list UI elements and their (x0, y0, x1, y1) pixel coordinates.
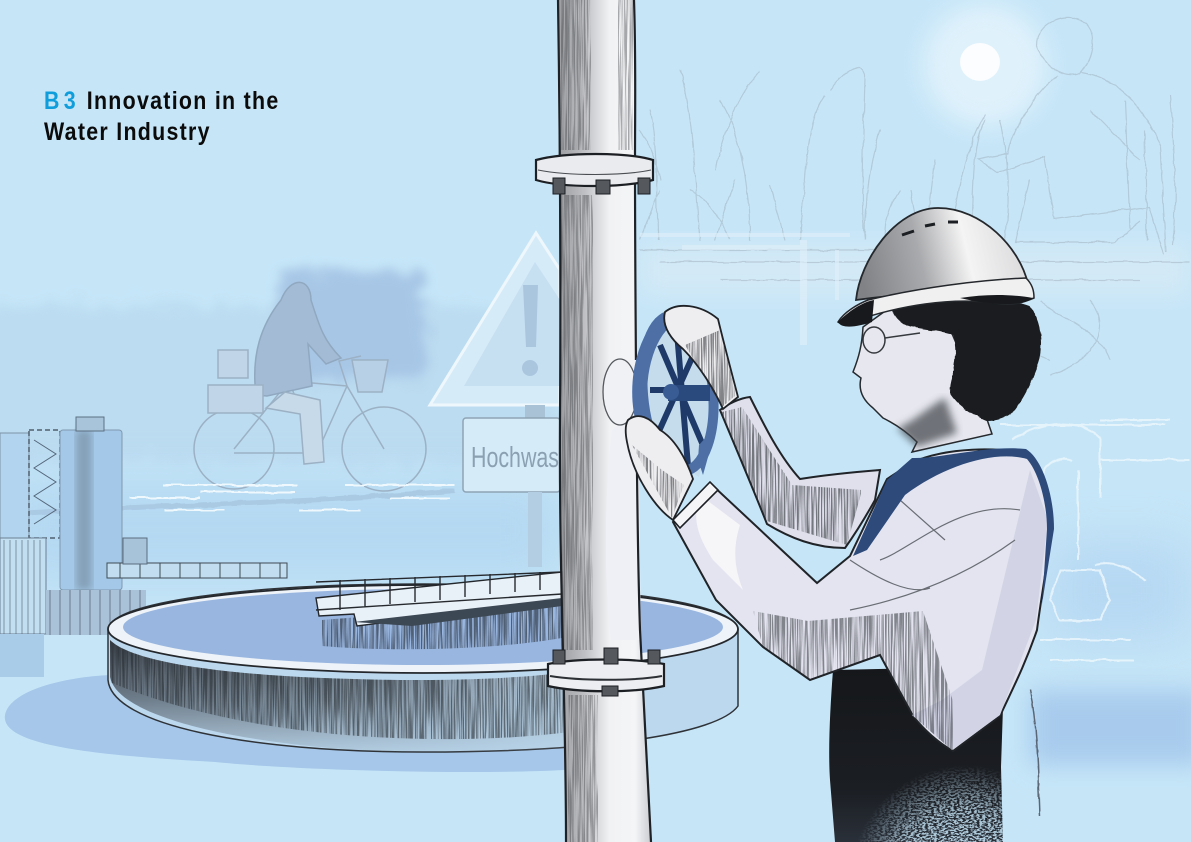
shirt highlight band (696, 495, 743, 590)
eyeglasses (863, 327, 920, 353)
tank rim (108, 585, 738, 673)
shirt hatching (753, 611, 953, 751)
worker overalls (829, 667, 1040, 842)
valve stem (603, 359, 650, 425)
tank water (123, 589, 723, 665)
warning sign: flood: Hochwas (471, 442, 559, 474)
hard hat (838, 208, 1034, 327)
dark water reflection (322, 598, 562, 649)
upper pipe flange (536, 154, 653, 194)
walkway railings (316, 572, 562, 610)
water reflection strips (640, 233, 850, 345)
shirt shadow lavender (912, 470, 1048, 750)
valve handwheel (636, 311, 720, 477)
title: Water Industry (44, 118, 211, 146)
sun glow (923, 3, 1047, 127)
neck shadow (897, 398, 957, 447)
white water strokes (130, 485, 455, 510)
background sketch: cyclist (194, 282, 426, 491)
tank wall streaks (110, 640, 570, 739)
lower walkway platform (354, 598, 562, 626)
warning sign: flood (430, 233, 560, 567)
shirt seam lines (850, 500, 1020, 610)
worker head (853, 298, 1042, 452)
clarifier tank (108, 572, 738, 752)
hair (892, 298, 1042, 421)
tank outer wall (108, 584, 738, 752)
lower pipe flange (548, 648, 664, 696)
vertical pipe (558, 0, 652, 842)
worker shirt: torso and lower arm (673, 449, 1051, 751)
worker hands (626, 306, 738, 520)
cuff (673, 482, 718, 528)
title: B3 Innovation in the (44, 87, 280, 115)
title (44, 87, 280, 146)
background sketch: farmer and plants (640, 17, 1190, 375)
face and neck (853, 304, 992, 452)
walkway bridge (316, 572, 562, 626)
tank wall shadow (110, 640, 570, 752)
water treatment towers (0, 417, 287, 677)
background sketch: tap and pipes (1000, 420, 1190, 660)
overall strap (853, 448, 1054, 604)
worker upper forearm (720, 397, 880, 548)
